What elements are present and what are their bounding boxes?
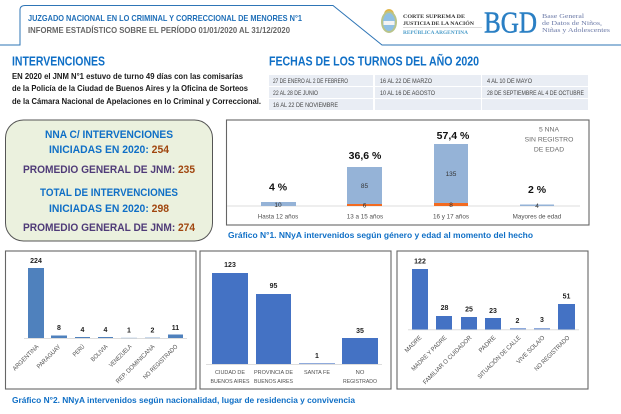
chart: lugar de residencia: 1 xyxy=(315,353,319,360)
chart: gráfico 1 edad: 135 xyxy=(446,171,457,178)
chart: lugar de residencia: PROVINCIA DE xyxy=(254,370,293,376)
chart: nacionalidad: PERÚ xyxy=(72,343,86,358)
chart: convivencia: 28 xyxy=(441,305,448,312)
note: sin registro: DE EDAD xyxy=(534,146,564,154)
panel: totals callout: NNA C/ INTERVENCIONES xyxy=(45,129,173,141)
chart: convivencia: VIVE SOLA/O xyxy=(515,334,547,366)
logo: BGD: BGD xyxy=(484,4,537,40)
chart: convivencia: 51 xyxy=(563,294,570,300)
table: 22 AL 28 DE JUNIO xyxy=(273,91,318,97)
chart: lugar de residencia: 123 xyxy=(224,262,236,269)
chart: nacionalidad: PARAGUAY xyxy=(36,343,62,370)
logo: Corte Suprema xyxy=(403,14,482,36)
chart: gráfico 1 edad: 36,6 % xyxy=(349,150,382,162)
panel: totals callout xyxy=(6,120,212,241)
icon: national coat of arms xyxy=(381,9,397,33)
chart: nacionalidad: 8 xyxy=(57,325,61,332)
caption: gráfico 1: Gráfico N°1. NNyA intervenidos según género y edad al momento del hecho xyxy=(228,230,533,240)
panel: totals callout: TOTAL DE INTERVENCIONES xyxy=(40,187,178,199)
chart: convivencia: PADRE xyxy=(478,334,497,354)
chart: nacionalidad: VENEZUELA xyxy=(108,343,134,369)
chart: convivencia: 25 xyxy=(465,306,473,314)
chart: convivencia: FAMILIAR O CUIDADOR xyxy=(422,334,474,386)
chart: nacionalidad: 2 xyxy=(151,328,155,334)
header banner xyxy=(0,6,621,45)
chart: convivencia: NO REGISTRADO xyxy=(533,334,572,373)
chart: lugar de residencia: CIUDAD DE xyxy=(215,370,245,376)
chart: lugar de residencia: REGISTRADO xyxy=(343,379,377,385)
logo: BGD: Base General xyxy=(542,14,584,20)
note: sin registro xyxy=(525,126,573,154)
text block: de la Cámara Nacional de Apelaciones en lo Criminal y Correccional. xyxy=(12,96,261,106)
chart: lugar de residencia: NO xyxy=(356,370,365,376)
chart: nacionalidad: BOLIVIA xyxy=(90,343,110,363)
table: 27 DE ENERO AL 2 DE FEBRERO xyxy=(273,79,348,85)
chart: gráfico 1 edad: 2 % xyxy=(528,184,547,196)
title: JUZGADO NACIONAL EN LO CRIMINAL Y CORRECCIONAL DE MENORES N°1 xyxy=(28,13,302,23)
table: 16 AL 22 DE NOVIEMBRE xyxy=(273,103,338,109)
text block: EN 2020 el JNM N°1 estuvo de turno 49 días con las comisarías xyxy=(12,71,243,81)
table xyxy=(269,75,588,110)
text block: de la Policía de la Ciudad de Buenos Aires y la Oficina de Sorteos xyxy=(12,83,248,93)
logo: BGD: Niñas y Adolescentes xyxy=(542,28,611,34)
chart: gráfico 1 edad xyxy=(226,120,589,225)
chart: lugar de residencia: BUENOS AIRES xyxy=(254,379,293,385)
panel: totals callout: PROMEDIO GENERAL DE JNM: 274 xyxy=(23,222,196,234)
chart: nacionalidad: 4 xyxy=(104,327,108,334)
table: 16 AL 22 DE MARZO xyxy=(380,79,432,85)
chart: nacionalidad: REP. DOMINICANA xyxy=(115,343,157,385)
note: sin registro: SIN REGISTRO xyxy=(525,136,573,144)
chart: nacionalidad: 4 xyxy=(81,327,85,334)
panel: totals callout: PROMEDIO GENERAL DE JNM: 235 xyxy=(23,164,195,176)
chart: gráfico 1 edad: 10 xyxy=(274,202,282,209)
chart: convivencia: 3 xyxy=(540,317,544,324)
chart: convivencia: SITUACIÓN DE CALLE xyxy=(476,334,522,380)
chart: gráfico 1 edad: 13 a 15 años xyxy=(347,214,383,220)
chart: gráfico 1 edad: 4 % xyxy=(269,182,288,194)
chart: lugar de residencia: 35 xyxy=(356,328,364,335)
table: 4 AL 10 DE MAYO xyxy=(487,79,532,85)
logo: Corte Suprema: REPÚBLICA ARGENTINA xyxy=(403,30,468,36)
chart: gráfico 1 edad: 57,4 % xyxy=(437,130,470,142)
chart: gráfico 1 edad: 16 y 17 años xyxy=(433,214,469,220)
heading: FECHAS DE LOS TURNOS DEL AÑO 2020 xyxy=(269,54,479,68)
chart: nacionalidad: NO REGISTRADO xyxy=(142,343,180,381)
chart: nacionalidad xyxy=(6,251,196,389)
table: 10 AL 16 DE AGOSTO xyxy=(380,91,435,97)
chart: nacionalidad: 1 xyxy=(127,328,131,334)
chart: convivencia xyxy=(397,251,588,389)
chart: lugar de residencia: SANTA FE xyxy=(304,370,330,376)
panel: totals callout: INICIADAS EN 2020: 254 xyxy=(49,144,170,156)
chart: gráfico 1 edad: Mayores de edad xyxy=(513,214,562,220)
note: sin registro: 5 NNA xyxy=(539,126,559,134)
chart: convivencia: 23 xyxy=(489,308,497,315)
chart: convivencia: 2 xyxy=(516,318,520,325)
panel: fechas de los turnos xyxy=(269,54,588,110)
table: 28 DE SEPTIEMBRE AL 4 DE OCTUBRE xyxy=(487,91,584,97)
chart: lugar de residencia xyxy=(200,251,391,389)
chart: lugar de residencia: 95 xyxy=(270,283,277,290)
chart: nacionalidad: 11 xyxy=(172,325,179,332)
chart: gráfico 1 edad: 85 xyxy=(361,183,368,190)
subtitle: INFORME ESTADÍSTICO SOBRE EL PERÍODO 01/01/2020 AL 31/12/2020 xyxy=(28,25,290,35)
chart: convivencia: 122 xyxy=(414,258,426,266)
logo: Corte Suprema: CORTE SUPREMA DE xyxy=(403,14,465,20)
heading: INTERVENCIONES xyxy=(12,54,105,68)
panel: totals callout: INICIADAS EN 2020: 298 xyxy=(49,203,169,215)
logo: Corte Suprema: JUSTICIA DE LA NACIÓN xyxy=(403,19,474,27)
chart: convivencia: MADRE xyxy=(404,334,423,354)
chart: gráfico 1 edad: 6 xyxy=(363,202,367,210)
chart: gráfico 1 edad: 8 xyxy=(449,202,453,209)
chart: nacionalidad: 224 xyxy=(30,258,42,265)
chart: nacionalidad: ARGENTINA xyxy=(11,343,41,372)
logo: BGD xyxy=(484,4,611,40)
chart: gráfico 1 edad: Hasta 12 años xyxy=(258,214,298,220)
chart: gráfico 1 edad: 4 xyxy=(535,203,539,210)
caption: gráfico 2: Gráfico N°2. NNyA intervenidos según nacionalidad, lugar de residencia y convivencia xyxy=(12,395,355,405)
logo: BGD: de Datos de Niños, xyxy=(542,21,603,27)
chart: lugar de residencia: BUENOS AIRES xyxy=(210,379,250,385)
panel: intervenciones xyxy=(12,54,261,106)
chart: convivencia: MADRE Y PADRE xyxy=(410,334,448,373)
text block xyxy=(12,71,261,106)
